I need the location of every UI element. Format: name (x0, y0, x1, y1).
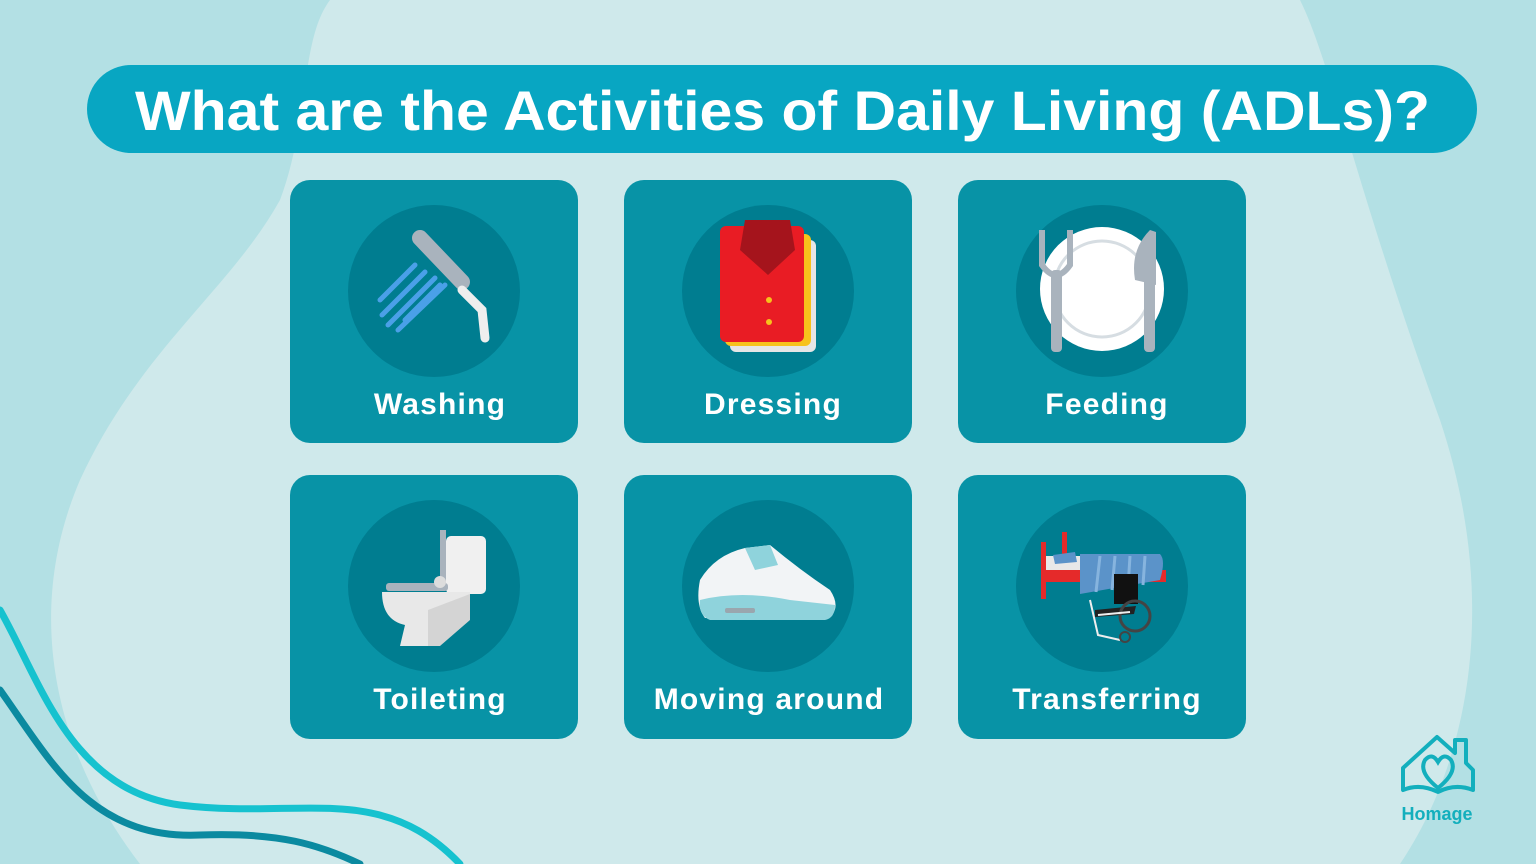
title (87, 65, 1477, 153)
card: dressing: Dressing (704, 388, 842, 421)
logo: Homage (1401, 737, 1473, 824)
card: feeding: Feeding (1045, 388, 1169, 421)
card: dressing (624, 180, 912, 443)
card: moving around (624, 475, 912, 739)
icon: toilet (382, 530, 486, 646)
card: moving around: Moving around (654, 683, 884, 716)
icon: sneaker (698, 545, 836, 620)
card: washing (290, 180, 578, 443)
card: toileting: Toileting (373, 683, 507, 716)
icon: shirt (720, 220, 816, 352)
icon: shower (380, 238, 485, 338)
title: What are the Activities of Daily Living (ADLs)? (135, 79, 1430, 142)
logo: Homage: Homage (1401, 804, 1473, 824)
icon: bed and wheelchair (1041, 532, 1166, 642)
card: feeding (958, 180, 1246, 443)
card: transferring (958, 475, 1246, 739)
card: washing: Washing (374, 388, 506, 421)
decorative waves (0, 610, 460, 864)
icon: plate and cutlery (1040, 227, 1164, 352)
card: toileting (290, 475, 578, 739)
card: transferring: Transferring (1012, 683, 1202, 716)
